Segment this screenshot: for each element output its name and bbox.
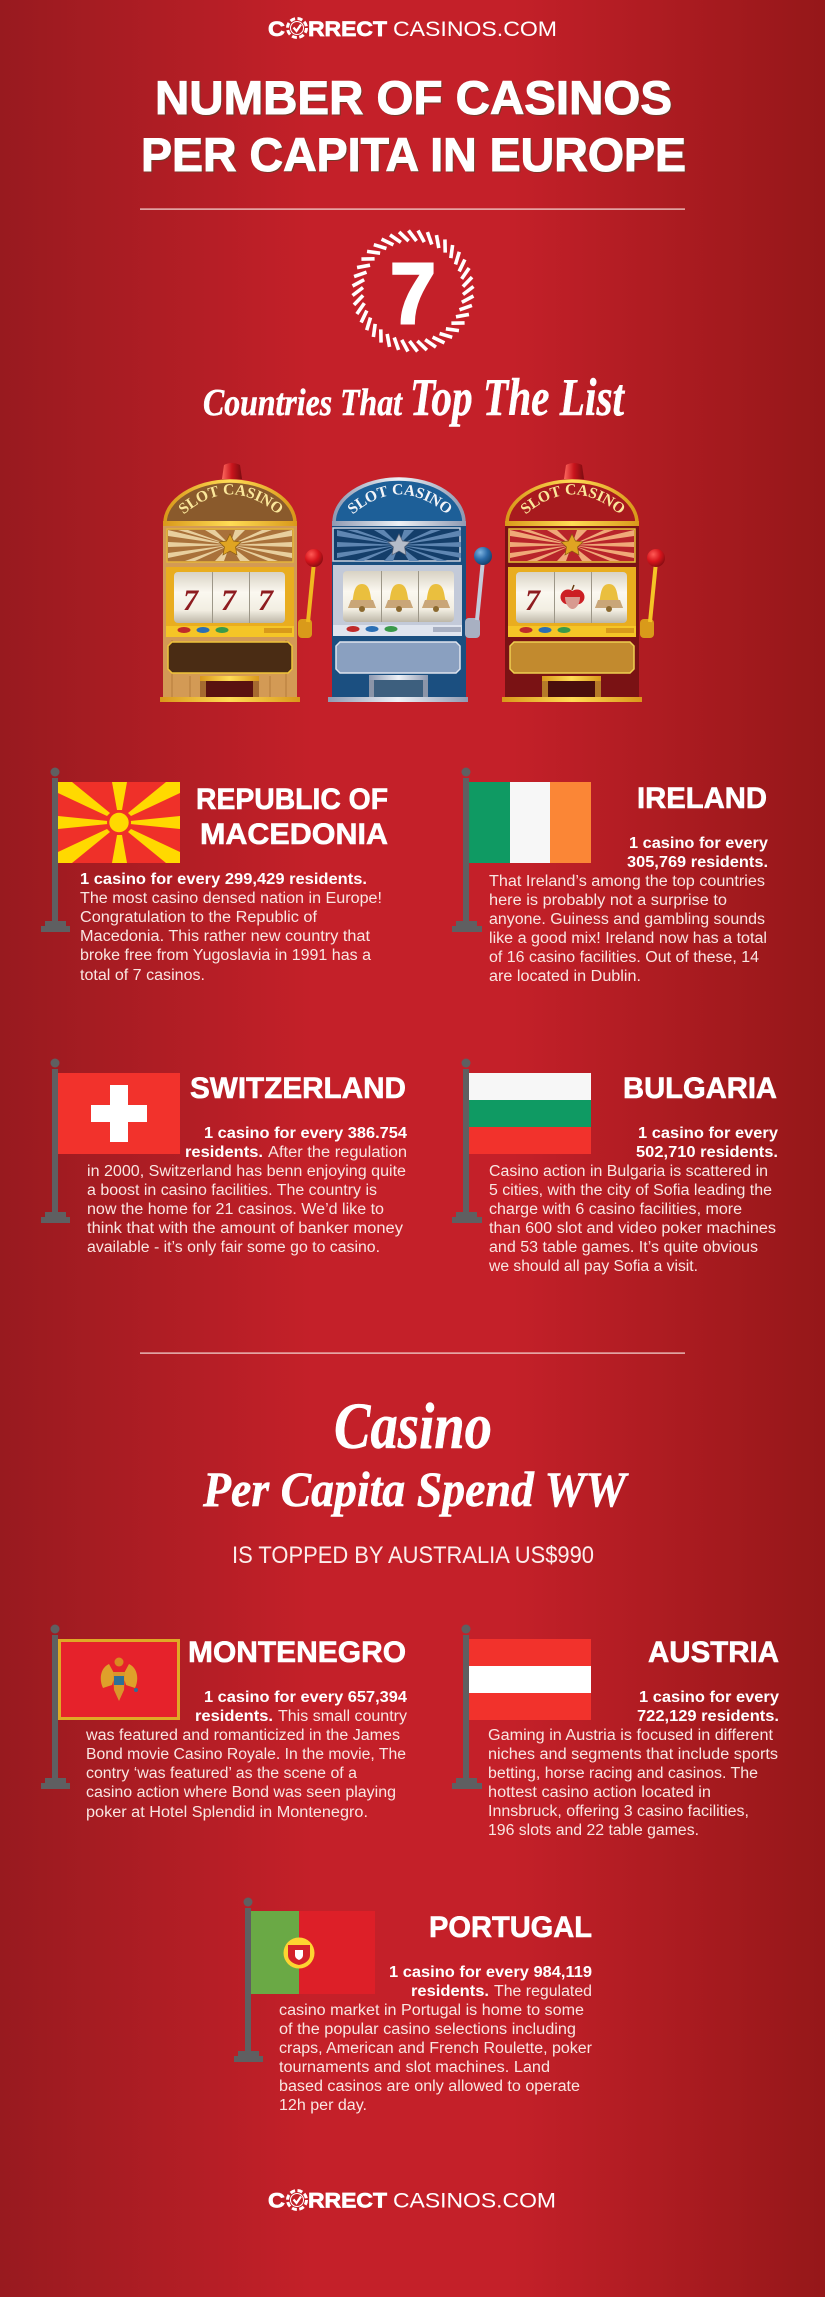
text block: casino market in Portugal is home to some bbox=[279, 2002, 584, 2019]
text block: 1 casino for every 984,119 bbox=[389, 1964, 592, 1981]
text block: now the home for 21 casinos. We’d like to bbox=[87, 1201, 384, 1218]
text block: hottest casino action located in bbox=[488, 1784, 711, 1801]
text block: 502,710 residents. bbox=[636, 1144, 778, 1161]
heading: PORTUGAL bbox=[429, 1911, 592, 1944]
text block: available - it’s only fair some go to casino. bbox=[87, 1239, 380, 1256]
icon: flag of Montenegro bbox=[60, 1640, 178, 1718]
text block bbox=[80, 871, 382, 984]
text block bbox=[488, 1125, 778, 1275]
logo: bottom: C bbox=[268, 2190, 285, 2212]
title: PER CAPITA IN EUROPE bbox=[141, 128, 686, 181]
panel: Austria bbox=[452, 1624, 779, 1839]
heading: BULGARIA bbox=[623, 1072, 777, 1105]
text block: and 53 table games. It’s quite obvious bbox=[489, 1239, 758, 1256]
logo: bottom bbox=[268, 2190, 556, 2212]
text block bbox=[279, 1964, 592, 2114]
logo: top: RRECT bbox=[308, 18, 387, 41]
title: NUMBER OF CASINOS bbox=[155, 71, 672, 124]
logo: bottom: RRECT bbox=[308, 2190, 387, 2212]
text block: Bond movie Casino Royale. In the movie, The bbox=[86, 1746, 406, 1763]
text block: charge with 6 casino facilities, more bbox=[489, 1201, 742, 1218]
icon: flag pole bbox=[452, 1058, 482, 1223]
text block: 1 casino for every 657,394 bbox=[204, 1689, 407, 1706]
text block: That Ireland’s among the top countries bbox=[489, 873, 765, 890]
text block bbox=[489, 835, 768, 985]
text block: The most casino densed nation in Europe! bbox=[80, 890, 382, 907]
illustration: three slot machines bbox=[160, 463, 665, 702]
text block bbox=[87, 1125, 407, 1256]
icon: flag of Ireland bbox=[469, 782, 591, 863]
text block: niches and segments that include sports bbox=[488, 1746, 778, 1763]
heading: casino per capita spend bbox=[202, 1390, 629, 1517]
slot machine: wood: 7 bbox=[221, 584, 237, 617]
text block: 1 casino for every 386.754 bbox=[204, 1125, 407, 1142]
text block: 1 casino for every 299,429 residents. bbox=[80, 871, 367, 888]
logo: top: CASINOS.COM bbox=[393, 18, 557, 41]
text block: craps, American and French Roulette, poker bbox=[279, 2040, 592, 2057]
panel: Ireland bbox=[452, 768, 768, 985]
logo: top: C bbox=[268, 18, 285, 41]
icon: double-headed eagle emblem bbox=[101, 1658, 138, 1701]
text block: 196 slots and 22 table games. bbox=[488, 1822, 699, 1839]
badge: number 7 in rope ring: 7 bbox=[390, 246, 436, 342]
text block: Gaming in Austria is focused in different bbox=[488, 1727, 774, 1744]
icon: coat of arms bbox=[284, 1938, 314, 1968]
icon: flag of Austria bbox=[469, 1639, 591, 1720]
title bbox=[141, 71, 686, 181]
slot machine: wood: 7 bbox=[183, 584, 199, 617]
slot machine: red bbox=[502, 463, 665, 702]
panel: Portugal bbox=[234, 1898, 592, 2114]
heading: MONTENEGRO bbox=[188, 1636, 406, 1669]
text block: of the popular casino selections including bbox=[279, 2021, 576, 2038]
text block: total of 7 casinos. bbox=[80, 967, 205, 984]
text block: 12h per day. bbox=[279, 2097, 367, 2114]
text block: betting, horse racing and casinos. The bbox=[488, 1765, 758, 1782]
text block: Macedonia. This rather new country that bbox=[80, 928, 371, 945]
text block: broke free from Yugoslavia in 1991 has a bbox=[80, 947, 371, 964]
text block: Innsbruck, offering 3 casino facilities, bbox=[488, 1803, 749, 1820]
text block: Casino action in Bulgaria is scattered in bbox=[489, 1163, 768, 1180]
text block: The regulated bbox=[494, 1983, 592, 2000]
text block: anyone. Guiness and gambling sounds bbox=[489, 911, 765, 928]
text block: 1 casino for every bbox=[639, 1689, 779, 1706]
icon: flag of Macedonia bbox=[58, 782, 180, 863]
text block: tournaments and slot machines. Land bbox=[279, 2059, 550, 2076]
heading: countries that top the list: Countries That bbox=[203, 382, 403, 424]
heading: IRELAND bbox=[637, 782, 767, 815]
heading: casino per capita spend: Per Capita Spend WW bbox=[202, 1461, 629, 1517]
text block: 1 casino for every bbox=[629, 835, 768, 852]
text block bbox=[85, 1689, 407, 1821]
text block: a boost in casino facilities. The country is bbox=[87, 1182, 377, 1199]
icon: flag pole bbox=[452, 768, 482, 932]
icon: poker chip check bbox=[288, 2190, 306, 2210]
text block: residents. bbox=[195, 1708, 273, 1725]
text block: contry ‘was featured’ as the scene of a bbox=[86, 1765, 357, 1782]
icon: poker chip check bbox=[288, 18, 306, 38]
text block: think that with the amount of banker money bbox=[87, 1220, 403, 1237]
text block: casino action where Bond was seen playing bbox=[86, 1784, 396, 1801]
text block: After the regulation bbox=[268, 1144, 407, 1161]
text block: we should all pay Sofia a visit. bbox=[488, 1258, 698, 1275]
subheading: IS TOPPED BY AUSTRALIA US$990 bbox=[232, 1542, 594, 1569]
panel: Bulgaria bbox=[452, 1058, 778, 1275]
icon: flag pole bbox=[41, 768, 70, 932]
logo: top bbox=[268, 18, 557, 41]
heading bbox=[196, 783, 388, 851]
text block: based casinos are only allowed to operate bbox=[279, 2078, 580, 2095]
slot machine: wood: SLOT CASINO bbox=[179, 484, 282, 514]
text block: of 16 casino facilities. Out of these, 14 bbox=[489, 949, 759, 966]
logo: bottom: CASINOS.COM bbox=[393, 2190, 556, 2212]
text block: Congratulation to the Republic of bbox=[80, 909, 318, 926]
icon: flag pole bbox=[41, 1624, 70, 1789]
slot machine: wood bbox=[160, 463, 323, 702]
text block: was featured and romanticized in the James bbox=[85, 1727, 400, 1744]
text block: 5 cities, with the city of Sofia leading the bbox=[489, 1182, 772, 1199]
heading: casino per capita spend: Casino bbox=[334, 1390, 492, 1463]
text block: are located in Dublin. bbox=[489, 968, 641, 985]
text block: poker at Hotel Splendid in Montenegro. bbox=[86, 1804, 368, 1821]
slot machine: blue bbox=[328, 477, 492, 702]
text block: like a good mix! Ireland now has a total bbox=[489, 930, 767, 947]
panel: Montenegro bbox=[41, 1624, 407, 1821]
text block: residents. bbox=[185, 1144, 263, 1161]
icon: flag of Bulgaria bbox=[469, 1073, 591, 1154]
text block: 722,129 residents. bbox=[637, 1708, 779, 1725]
text block: in 2000, Switzerland has benn enjoying quite bbox=[87, 1163, 406, 1180]
text block: 305,769 residents. bbox=[627, 854, 768, 871]
slot machine: blue: SLOT CASINO bbox=[348, 484, 452, 514]
icon: flag of Switzerland bbox=[58, 1073, 180, 1154]
heading: MACEDONIA bbox=[200, 818, 388, 851]
slot machine: red: 7 bbox=[525, 584, 541, 617]
text block: residents. bbox=[411, 1983, 489, 2000]
heading: AUSTRIA bbox=[648, 1636, 779, 1669]
heading: countries that top the list: Top The List bbox=[410, 369, 626, 427]
icon: flag pole bbox=[41, 1058, 70, 1223]
badge: number 7 in rope ring bbox=[352, 230, 474, 352]
heading: countries that top the list bbox=[203, 369, 626, 427]
slot machine: red: SLOT CASINO bbox=[521, 484, 624, 514]
icon: flag pole bbox=[452, 1624, 482, 1789]
panel: Republic of Macedonia bbox=[41, 768, 388, 984]
slot machine: wood: 7 bbox=[258, 584, 274, 617]
icon: flag of Portugal bbox=[251, 1911, 375, 1994]
text block: 1 casino for every bbox=[638, 1125, 778, 1142]
text block: here is probably not a surprise to bbox=[489, 892, 727, 909]
panel: Switzerland bbox=[41, 1058, 407, 1256]
text block: than 600 slot and video poker machines bbox=[489, 1220, 776, 1237]
icon: flag pole bbox=[234, 1898, 263, 2062]
text block bbox=[488, 1689, 779, 1839]
heading: REPUBLIC OF bbox=[196, 783, 388, 816]
text block: This small country bbox=[278, 1708, 407, 1725]
heading: SWITZERLAND bbox=[190, 1072, 406, 1105]
